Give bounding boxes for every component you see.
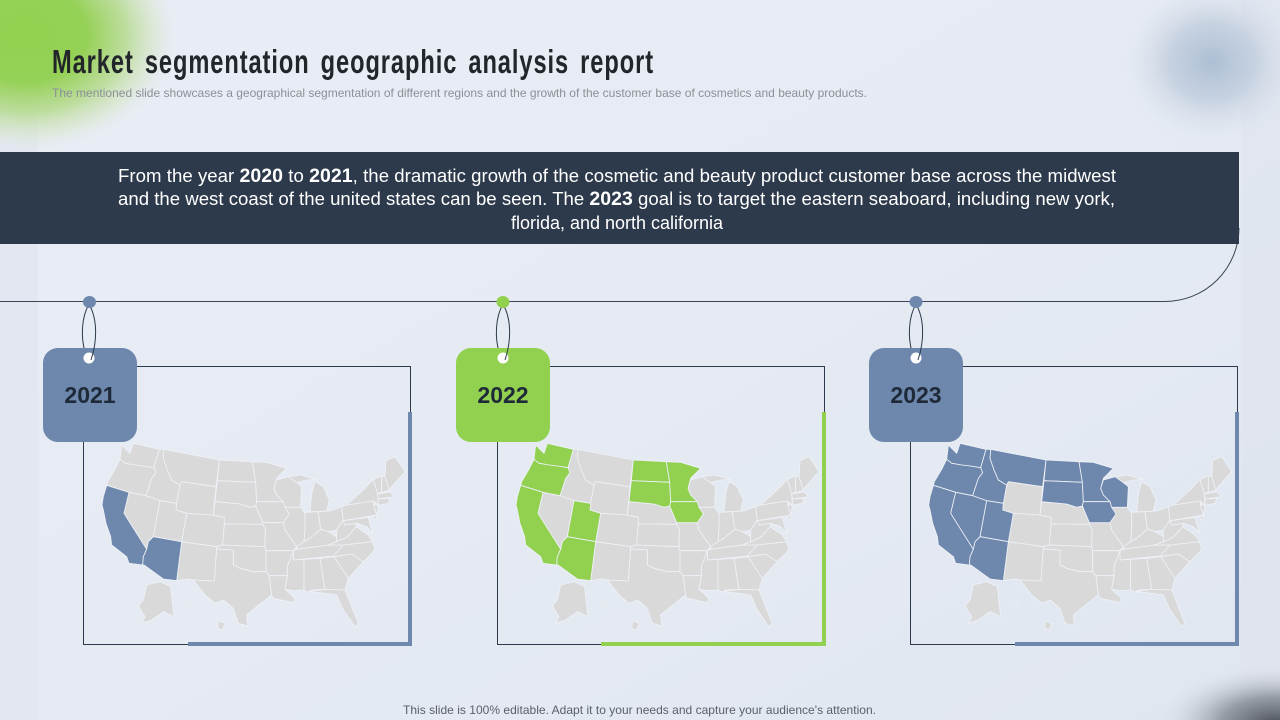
banner text line 2: and the west coast of the united states can be seen. The 2023 goal is to target the eastern seaboard, including new york, — [118, 188, 1115, 210]
year tag 2021: 2021 — [64, 382, 116, 408]
map: 2021 highlights California and Arizona — [102, 443, 405, 630]
year tag 2023 — [869, 296, 963, 442]
year tag 2021 — [43, 296, 137, 442]
timeline connector — [0, 228, 1239, 302]
footer note: This slide is 100% editable. Adapt it to your needs and capture your audience's attention. — [403, 703, 876, 717]
year tag 2023: 2023 — [890, 382, 942, 408]
panel frame 2022 — [498, 366, 824, 644]
banner text line 3: florida, and north california — [511, 213, 724, 233]
panel: 2023 — [869, 296, 1238, 644]
map: 2023 highlights western and north-central states — [929, 443, 1232, 630]
panel frame 2023 — [910, 366, 1238, 644]
panel: 2022 — [456, 296, 824, 644]
year tag 2022: 2022 — [477, 382, 529, 408]
banner — [0, 152, 1239, 244]
panel: 2021 — [43, 296, 410, 644]
title: Market segmentation geographic analysis report — [52, 43, 654, 80]
year tag 2022 — [456, 296, 550, 442]
subtitle: The mentioned slide showcases a geographical segmentation of different regions and the growth of the customer base of cosmetics and beauty products. — [52, 86, 867, 100]
banner text line 1: From the year 2020 to 2021, the dramatic growth of the cosmetic and beauty product customer base across the midwest — [118, 165, 1117, 187]
map: 2022 highlights west and midwest — [516, 443, 819, 630]
panel frame 2021 — [84, 366, 410, 644]
